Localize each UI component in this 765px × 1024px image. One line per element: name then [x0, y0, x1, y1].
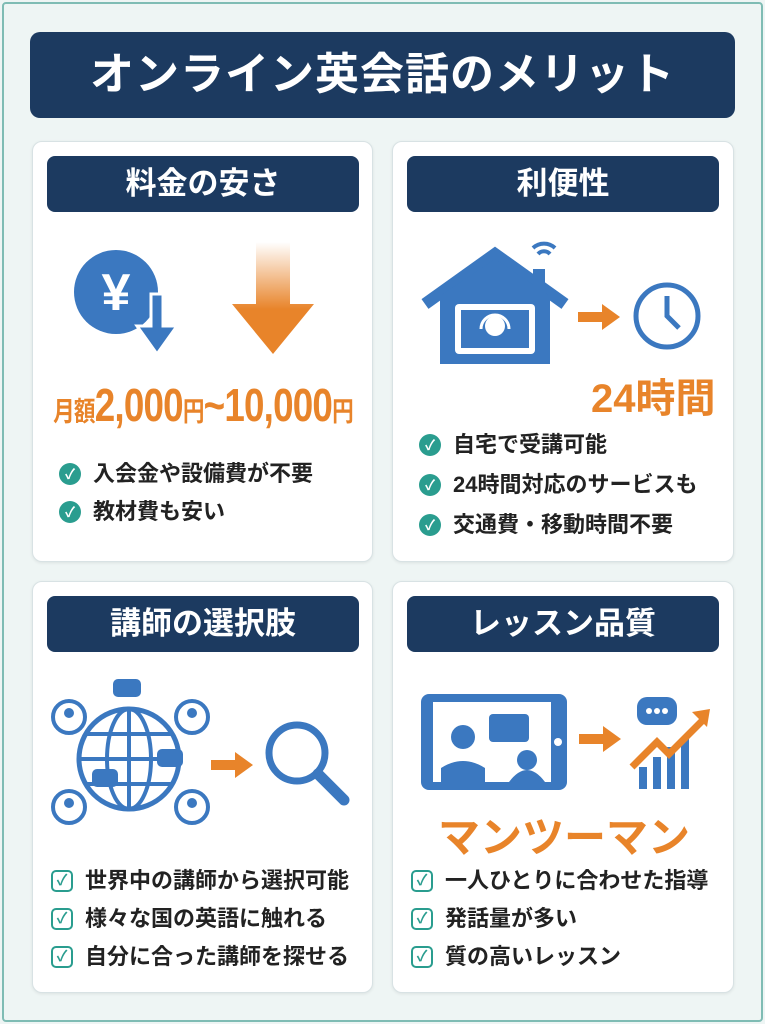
checklist: ✓ [417, 872, 427, 889]
checklist: ✓ [65, 466, 75, 482]
checklist: ✓ [57, 910, 67, 927]
heading: price [47, 156, 359, 212]
checklist: ✓ [57, 872, 67, 889]
checklist [411, 868, 708, 969]
arrow [211, 752, 253, 778]
checklist: 自宅で受講可能 [453, 432, 607, 457]
checklist: 一人ひとりに合わせた指導 [445, 868, 708, 893]
heading: teachers: 講師の選択肢 [110, 606, 296, 641]
checklist: ✓ [65, 504, 75, 520]
checklist: ✓ [417, 910, 427, 927]
checklist: 24時間対応のサービスも [453, 472, 697, 497]
checklist [419, 432, 697, 537]
checklist: 交通費・移動時間不要 [453, 512, 673, 537]
heading: price: 料金の安さ [126, 166, 280, 201]
checklist: 質の高いレッスン [445, 944, 621, 969]
checklist: ✓ [425, 517, 435, 533]
icon: clock [634, 282, 700, 350]
manto man text: マンツーマン [438, 814, 690, 861]
icon: house with headset [422, 242, 568, 364]
icon: globe network [51, 679, 210, 825]
checklist: 様々な国の英語に触れる [85, 906, 327, 931]
title [30, 32, 735, 118]
icon: yen down: ¥ [102, 264, 131, 322]
heading: quality [407, 596, 719, 652]
icon: chart growth [630, 697, 710, 789]
checklist [51, 868, 349, 969]
heading: convenience [407, 156, 719, 212]
checklist: ✓ [57, 948, 67, 965]
checklist: ✓ [425, 477, 435, 493]
checklist: 発話量が多い [445, 906, 577, 931]
icon: tablet video [421, 694, 567, 790]
checklist [59, 461, 313, 524]
checklist: ✓ [425, 437, 435, 453]
checklist: 入会金や設備費が不要 [93, 461, 313, 486]
panel: teachers [32, 581, 373, 993]
panel: price [32, 141, 373, 562]
24h text: 24時間 [591, 377, 716, 421]
heading: convenience: 利便性 [516, 166, 610, 201]
arrow [578, 304, 620, 330]
checklist: ✓ [417, 948, 427, 965]
panel: lesson quality [392, 581, 734, 993]
icon: magnifier [266, 722, 350, 806]
price text: 月額2,000円~10,000円 [53, 379, 353, 431]
icon: orange arrow [232, 244, 314, 354]
heading: teachers [47, 596, 359, 652]
icon: yen down [74, 250, 174, 352]
panel: convenience [392, 141, 734, 562]
arrow [579, 726, 621, 752]
checklist: 教材費も安い [93, 499, 225, 524]
checklist: 自分に合った講師を探せる [85, 944, 349, 969]
heading: quality: レッスン品質 [470, 606, 656, 641]
checklist: 世界中の講師から選択可能 [85, 868, 349, 893]
title: オンライン英会話のメリット [90, 50, 675, 99]
